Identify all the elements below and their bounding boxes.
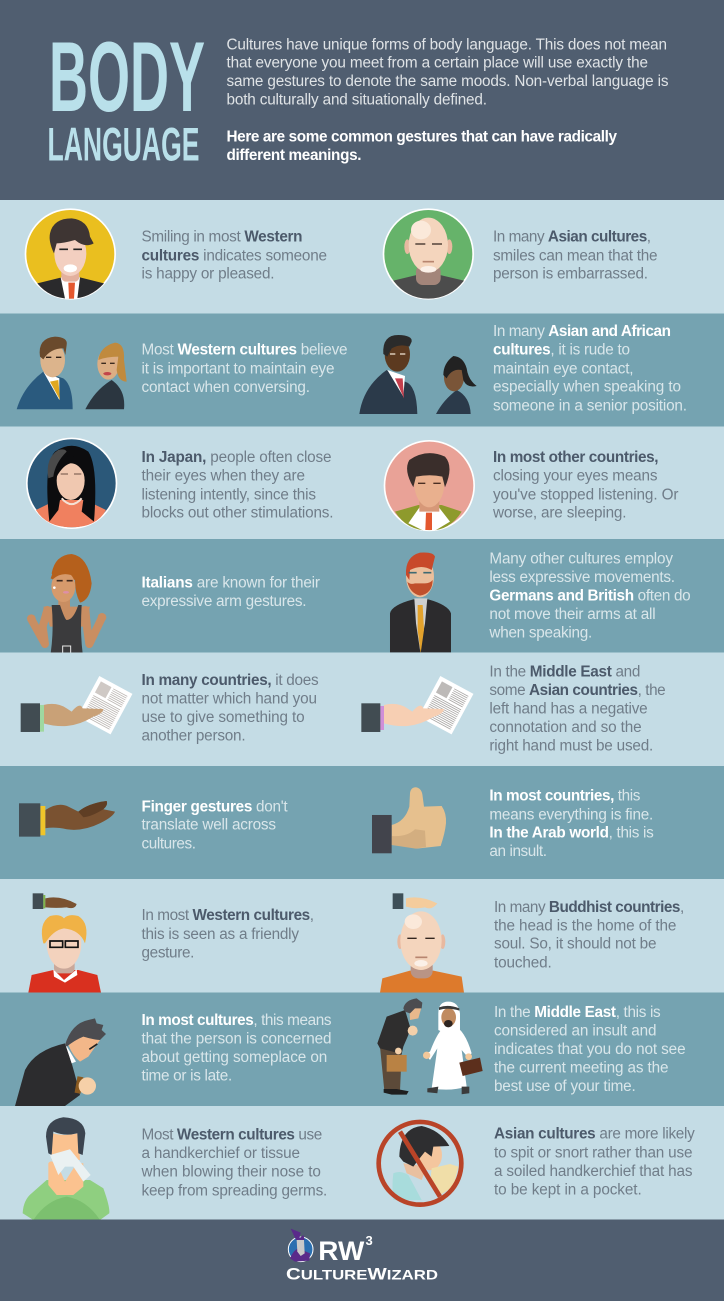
text: eye contact in asian and african cultures [493,323,687,414]
text: asian cultures spit or snort: Asian cultures are more likely [494,1126,695,1143]
title [48,21,205,172]
text: finger gestures: cultures. [142,835,196,852]
icon: western business couple [17,337,127,409]
text: any hand is fine: In many countries, it does [142,672,319,689]
text: watch as insult in middle east [494,1004,686,1095]
text: closing eyes in japan: blocks out other stimulations. [142,504,334,521]
text: smiles in asian cultures: person is embarrassed. [493,266,648,283]
icon: hand patting bald man [380,893,464,993]
text: smiling in western cultures [142,229,327,283]
text: closing eyes elsewhere: you've stopped listening. Or [493,486,678,503]
row 9: blowing the nose [0,1106,724,1220]
text: finger gestures: translate well across [142,817,276,834]
text: any hand is fine: not matter which hand you [142,690,317,707]
text: head pat in western cultures [142,907,314,961]
text: smiles in asian cultures: In many Asian cultures, [493,229,651,246]
text: italian gestures: expressive arm gestures. [142,593,306,610]
text: handkerchief in western cultures: keep from spreading germs. [142,1182,327,1199]
text: german and british gestures: when speaking. [488,624,592,641]
text: closing eyes in japan: their eyes when they are [142,468,305,485]
header panel [0,0,724,200]
text: handkerchief in western cultures: when blowing their nose to [140,1164,321,1181]
icon: tan hand passing paper [21,676,132,734]
row 8: looking at a watch [0,992,724,1106]
title: LANGUAGE [48,119,200,172]
text: handkerchief in western cultures [140,1127,327,1199]
text: watch as insult in middle east: the current meeting as the [494,1059,668,1076]
text: german and british gestures: Many other cultures employ [489,551,673,568]
logo: RW3 CultureWizard: 3 [366,1233,373,1248]
text: thumbs up meanings: In most countries, this [489,787,641,804]
text: head pat in western cultures: gesture. [142,944,194,961]
icon: light hand passing paper [361,676,473,734]
text: german and british gestures: not move their arms at all [489,606,656,623]
row 2: eye contact [0,314,724,426]
row 6: hand gestures [0,766,724,879]
text: left hand negative connotation [489,664,666,755]
text: watch means late: In most cultures, this means [142,1012,332,1029]
text: head pat in western cultures: In most Western cultures, [142,907,314,924]
row 3: closing eyes [0,426,724,540]
text: eye contact in asian and african cultures: maintain eye contact, [493,360,634,377]
icon: hand patting blond man [28,893,101,993]
row 5: giving with hands [0,652,724,766]
icon: man blowing nose in tissue [23,1117,109,1220]
text: watch means late [142,1012,332,1085]
text: watch as insult in middle east: best use of your time. [494,1078,636,1095]
icon: smiling man portrait [25,208,116,300]
text: closing eyes in japan: listening intently, since this [142,486,316,503]
text: smiling in western cultures: cultures indicates someone [142,247,327,264]
icon: prohibited handkerchief [379,1122,461,1205]
text: eye contact in western cultures: Most Western cultures believe [142,342,348,359]
text: smiling in western cultures: Smiling in most Western [142,229,302,246]
text: any hand is fine: use to give something to [142,709,305,726]
text: left hand negative connotation: some Asian countries, the [489,682,666,699]
logo: RW3 CultureWizard [286,1229,438,1283]
text: eye contact in western cultures: contact when conversing. [142,379,310,396]
intro text: different meanings. [226,147,362,164]
text: finger gestures [142,798,288,852]
row 4: arm gestures [0,539,724,653]
text: head pat in western cultures: this is seen as a friendly [142,926,299,943]
text: watch as insult in middle east: indicates that you do not see [494,1041,686,1058]
text: german and british gestures: Germans and British often do [489,587,691,604]
icon: asian and african business couple [359,335,477,414]
icon: thumbs up [372,787,446,853]
row 1: smiling [0,200,724,314]
text: closing eyes elsewhere [492,449,678,521]
icon: man checking watch beside arab man [377,998,483,1095]
text: finger gestures: Finger gestures don't [142,798,288,815]
text: closing eyes in japan: In Japan, people often close [142,449,332,466]
text: closing eyes elsewhere: worse, are sleeping. [492,504,626,521]
text: head in buddhist countries: the head is the home of the [494,917,676,934]
intro text: Cultures have unique forms of body language. This does not mean [226,36,667,54]
text: watch means late: about getting someplace on [142,1049,327,1066]
footer panel [0,1220,724,1301]
text: eye contact in asian and african cultures: In many Asian and African [493,323,671,340]
text: left hand negative connotation: right hand must be used. [489,738,653,755]
icon: man checking watch [15,1018,106,1106]
text: closing eyes elsewhere: closing your eyes means [493,468,658,485]
logo: RW3 CultureWizard: CULTURE WIZARD [286,1264,438,1283]
text: asian cultures spit or snort [494,1126,695,1198]
text: asian cultures spit or snort: to spit or snort rather than use [494,1145,692,1162]
text: watch as insult in middle east: considered an insult and [494,1023,656,1040]
text: closing eyes in japan [142,449,334,521]
text: smiles in asian cultures [493,229,658,283]
text: head in buddhist countries: touched. [494,954,552,971]
text: watch as insult in middle east: In the Middle East, this is [494,1004,661,1021]
text: smiling in western cultures: is happy or pleased. [142,266,274,283]
text: asian cultures spit or snort: to be kept in a pocket. [494,1181,642,1198]
text: thumbs up meanings: In the Arab world, this is [489,825,654,842]
text: handkerchief in western cultures: Most Western cultures use [142,1127,322,1144]
text: handkerchief in western cultures: a handkerchief or tissue [142,1145,300,1162]
intro text: Here are some common gestures that can have radically [226,128,617,146]
text: thumbs up meanings [489,787,654,860]
intro text [226,36,669,164]
text: eye contact in western cultures [142,342,348,396]
intro text: same gestures to denote the same moods. Non-verbal language is [226,73,669,90]
icon: japanese woman portrait [26,438,117,529]
text: german and british gestures: less expressive movements. [489,569,675,586]
text: any hand is fine [142,672,319,745]
logo: RW3 CultureWizard: RW [318,1236,365,1266]
text: smiles in asian cultures: smiles can mean that the [493,247,658,264]
icon: red-haired businessman [390,552,451,653]
icon: dark hand gesture [19,801,115,837]
row 7: touching the head [0,879,724,993]
text: italian gestures [142,574,320,610]
text: left hand negative connotation: connotation and so the [489,719,642,736]
text: italian gestures: Italians are known for their [142,574,320,591]
text: watch means late: that the person is concerned [142,1031,332,1048]
intro text: that everyone you meet from a certain place will use exactly the [226,55,648,72]
icon: bald man portrait [383,208,474,300]
intro text: both culturally and situationally defined. [226,92,487,108]
text: any hand is fine: another person. [142,728,246,745]
text: thumbs up meanings: an insult. [489,843,547,860]
text: head in buddhist countries: In many Buddhist countries, [494,899,684,916]
text: left hand negative connotation: left hand has a negative [489,701,648,718]
text: eye contact in asian and african cultures: someone in a senior position. [493,397,687,414]
icon: man with closed eyes portrait [384,440,475,531]
text: asian cultures spit or snort: a soiled handkerchief that has [494,1163,693,1180]
text: thumbs up meanings: means everything is fine. [489,806,653,823]
text: german and british gestures [488,551,691,641]
text: closing eyes elsewhere: In most other countries, [493,449,658,466]
title: BODY [49,21,205,132]
text: eye contact in asian and african cultures: cultures, it is rude to [493,342,630,359]
text: eye contact in western cultures: it is important to maintain eye [142,360,334,377]
text: left hand negative connotation: In the Middle East and [489,664,640,681]
text: head in buddhist countries: soul. So, it should not be [494,936,656,953]
text: eye contact in asian and african cultures: especially when speaking to [493,379,681,396]
text: watch means late: time or is late. [142,1068,232,1085]
text: head in buddhist countries [494,899,684,971]
icon: italian woman with raised arms [27,554,106,653]
